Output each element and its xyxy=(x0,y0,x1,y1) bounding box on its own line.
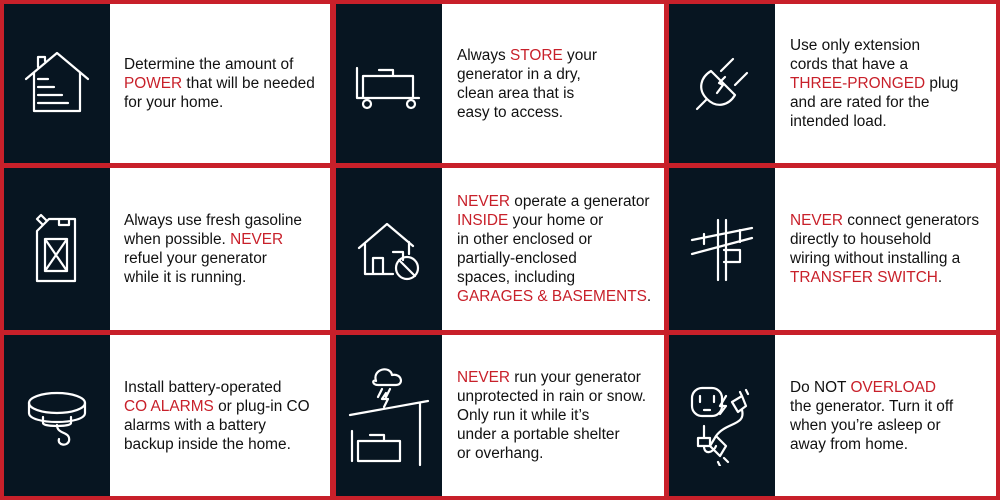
text: generator in a dry, xyxy=(457,66,581,82)
text xyxy=(457,46,597,120)
text: TRANSFER SWITCH. xyxy=(790,269,942,286)
panel: store xyxy=(336,4,664,163)
text: CO ALARMS or plug-in CO xyxy=(124,398,310,414)
text: wiring without installing a xyxy=(790,250,960,267)
text: clean area that is xyxy=(457,84,574,102)
text: spaces, including xyxy=(457,269,575,286)
text: directly to household xyxy=(790,231,931,248)
text: Only run it while it’s xyxy=(457,407,589,424)
text xyxy=(124,56,315,111)
text: NEVER connect generators xyxy=(790,212,979,229)
panel: gasoline xyxy=(4,168,330,330)
text: when possible. NEVER xyxy=(124,231,283,248)
text: while it is running. xyxy=(124,269,246,286)
text xyxy=(457,193,651,305)
text: Always STORE your xyxy=(457,46,597,64)
text: INSIDE your home or xyxy=(457,212,603,229)
text xyxy=(457,369,646,462)
icon: power pole xyxy=(669,168,775,330)
text: alarms with a battery xyxy=(124,416,266,434)
text: cords that have a xyxy=(790,56,908,73)
text: THREE-PRONGED plug xyxy=(790,75,958,92)
panel: transfer switch xyxy=(669,168,996,330)
panel: CO alarms xyxy=(4,335,330,496)
text: or overhang. xyxy=(457,445,543,462)
text: backup inside the home. xyxy=(124,436,291,452)
text: Install battery-operated xyxy=(124,378,281,396)
icon: plug xyxy=(669,4,775,163)
text: refuel your generator xyxy=(124,250,267,267)
text: partially-enclosed xyxy=(457,250,577,267)
text xyxy=(790,378,954,452)
text: Always use fresh gasoline xyxy=(124,212,302,229)
text xyxy=(124,378,310,452)
panel: power xyxy=(4,4,330,163)
text: Use only extension xyxy=(790,37,920,54)
text: Do NOT OVERLOAD xyxy=(790,378,936,396)
text: easy to access. xyxy=(457,104,563,120)
panel: overload xyxy=(669,335,996,496)
text: for your home. xyxy=(124,94,223,111)
icon: outlet and plugs xyxy=(669,335,775,496)
panel: extension cords xyxy=(669,4,996,163)
icon: house xyxy=(4,4,110,163)
icon: shelter and cloud xyxy=(336,335,442,496)
text xyxy=(790,212,979,286)
panel: inside xyxy=(336,168,664,330)
text: NEVER operate a generator xyxy=(457,193,650,210)
icon: generator xyxy=(336,4,442,163)
text: away from home. xyxy=(790,436,908,452)
text: the generator. Turn it off xyxy=(790,398,953,414)
text: NEVER run your generator xyxy=(457,369,641,386)
text: unprotected in rain or snow. xyxy=(457,388,646,405)
icon: gas can xyxy=(4,168,110,330)
text: when you’re asleep or xyxy=(790,416,941,434)
text: GARAGES & BASEMENTS. xyxy=(457,288,651,305)
text: Determine the amount of xyxy=(124,56,293,73)
icon: smoke alarm xyxy=(4,335,110,496)
text xyxy=(790,37,958,130)
text xyxy=(124,212,302,286)
panel: rain xyxy=(336,335,664,496)
text: POWER that will be needed xyxy=(124,75,315,92)
text: intended load. xyxy=(790,113,887,130)
icon: house with no symbol xyxy=(336,168,442,330)
text: in other enclosed or xyxy=(457,231,592,248)
text: and are rated for the xyxy=(790,94,929,111)
text: under a portable shelter xyxy=(457,426,620,443)
